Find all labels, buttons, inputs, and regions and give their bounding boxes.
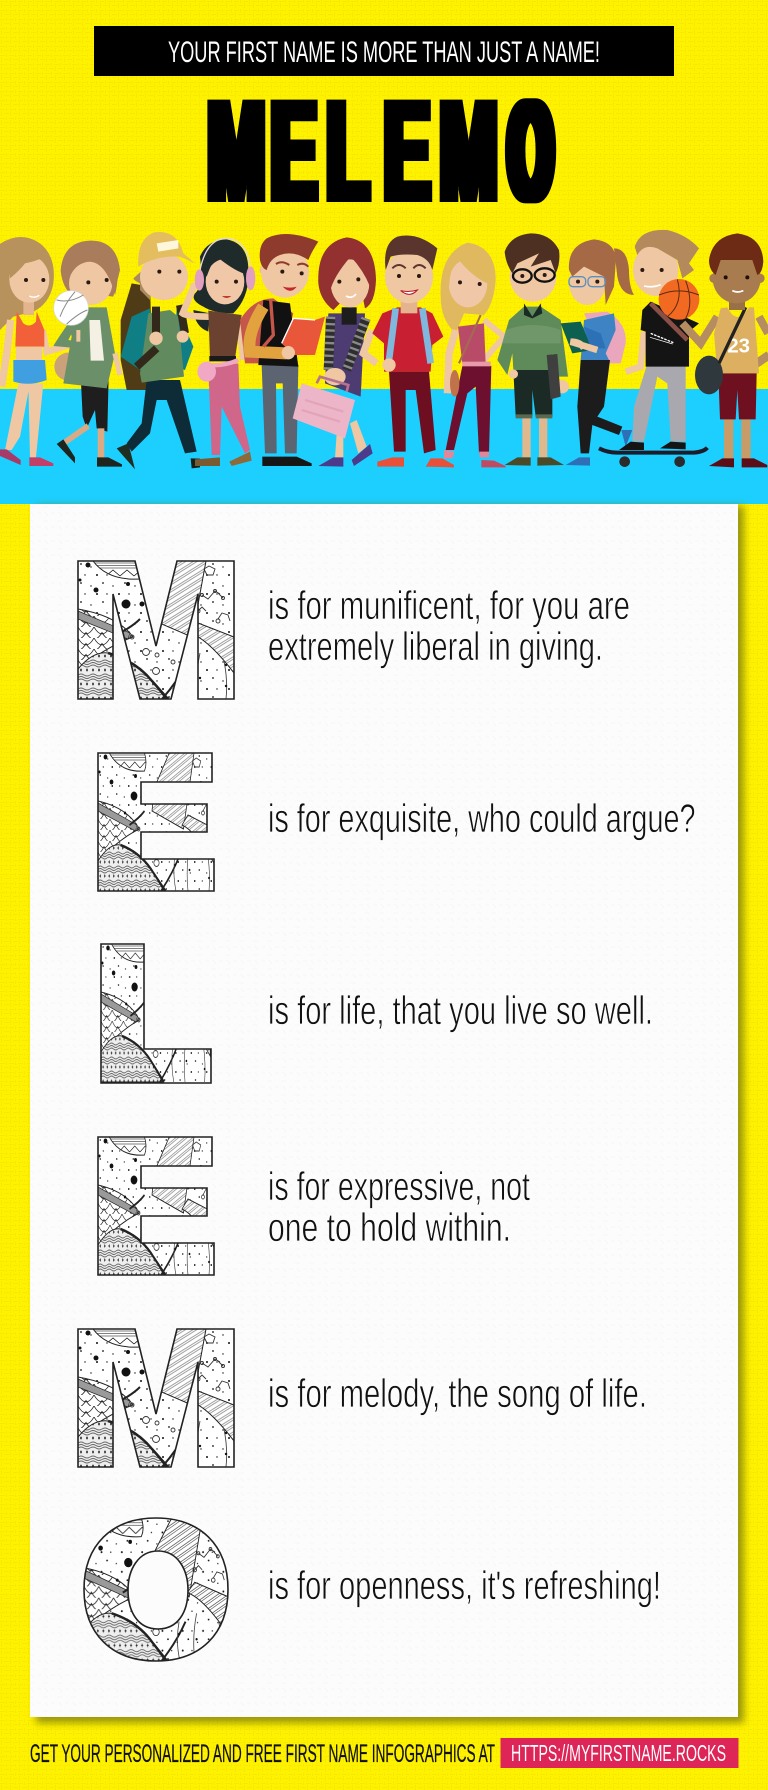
text: munificent: is for munificent, for you are xyxy=(268,584,630,628)
person: girl with ponytail, glasses and green tablet xyxy=(561,239,634,466)
person: boy with cap and hiking backpack xyxy=(117,232,200,469)
person: girl in orange top xyxy=(0,237,75,466)
person: boy reading an orange book xyxy=(240,234,325,466)
white content panel xyxy=(30,504,738,1717)
row M: munificent xyxy=(78,561,641,699)
blue floor band xyxy=(0,389,768,504)
row O: openness xyxy=(84,1518,661,1661)
title: MELEM xyxy=(208,73,497,229)
row E: exquisite xyxy=(98,753,696,891)
row L: life xyxy=(101,944,653,1083)
doodle letter E second xyxy=(98,1137,215,1275)
footer xyxy=(30,1738,738,1768)
doodle letter L xyxy=(101,944,211,1083)
panel shadow xyxy=(36,506,744,1723)
person: girl with pink handbag xyxy=(293,237,376,467)
person: boy in red t-shirt xyxy=(363,236,454,467)
person: girl with headphones and pink trousers xyxy=(183,238,255,466)
heading banner xyxy=(94,26,674,76)
person: skater with basketball on skateboard xyxy=(599,230,717,467)
illustration: row of twelve people xyxy=(0,230,768,469)
text: expressive: one to hold within. xyxy=(268,1206,511,1250)
person: boy with glasses and green sweater xyxy=(497,233,569,466)
row E: expressive xyxy=(98,1137,541,1275)
person: boy in number 23 tank top: 23 xyxy=(727,335,750,358)
text: munificent: extremely liberal in giving. xyxy=(268,625,603,669)
person: boy in number 23 tank top xyxy=(695,233,768,467)
doodle letter O xyxy=(84,1518,228,1661)
row M: melody xyxy=(78,1329,647,1467)
person: blonde girl with shoulder bag xyxy=(441,243,506,467)
text: expressive: is for expressive, not xyxy=(268,1165,530,1209)
doodle letter E xyxy=(98,753,215,891)
doodle letter M second xyxy=(78,1329,234,1467)
doodle letter M xyxy=(78,561,234,699)
title: O xyxy=(509,72,552,229)
person: girl with volleyball and green jacket xyxy=(53,241,122,467)
